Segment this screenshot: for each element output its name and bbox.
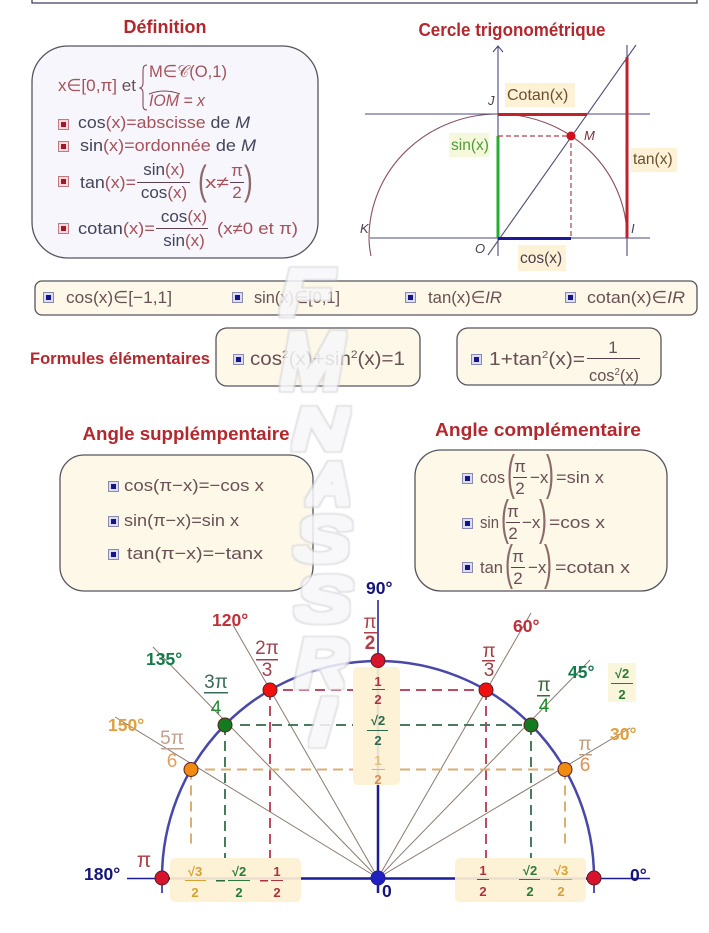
axes [365,45,650,256]
panel: formula one plus tan squared: 1 [608,338,618,357]
row: tan definition [58,158,253,203]
label backgrounds [449,83,677,271]
heading: Définition: Définition [124,17,206,37]
labels: cos(x) [520,250,562,267]
row: tan complementary: 2 [513,569,523,588]
panel: formula cos squared plus sin squared: 2 [351,349,358,361]
watermark: M [281,318,343,405]
radian labels: 2 [365,633,375,654]
axis value labels: positive side: 2 [557,884,565,899]
panel: formula cos squared plus sin squared [216,328,420,386]
rays [115,613,630,878]
degree labels: 150° [108,715,144,735]
semicircle [162,661,594,878]
panel: supplementary angle: sin(π−x)=sin x [124,511,240,530]
radian labels: π [578,734,592,755]
row: sin complementary: =cos x [549,513,606,532]
row: sin complementary: −x [522,513,541,532]
orange projections [191,770,565,848]
labels: sin(x) [451,137,489,154]
panel: definition [32,46,318,258]
row: sin definition: sin(x)=ordonnée de M [80,136,257,155]
text: domain of x: x∈[0,π] et [58,76,136,95]
labels: J [487,93,495,108]
radian labels: 3π [204,672,228,693]
labels: Cotan(x) [507,87,568,104]
watermark: F [280,259,334,328]
row: cos complementary: ) [546,447,554,500]
axis value labels: vertical: 1 [374,753,382,768]
axis value labels: vertical: 1 [374,674,382,689]
axis value labels: vertical: 2 [374,772,382,787]
heading: Angle supplémentaire: Angle supplémpentaire [82,424,290,444]
watermark: R [296,626,348,700]
semicircle [369,114,627,256]
row: tan definition: ( [198,158,207,203]
row: cos complementary: =sin x [556,468,605,487]
row: tan definition: cos(x) [141,183,187,202]
brace system [140,62,227,110]
radian labels: 6 [580,755,590,776]
row: sin complementary [462,492,606,545]
row: tan definition: π [231,161,243,180]
red projections [270,690,486,858]
radian labels: 2π [255,638,279,659]
row: sin complementary: sin [480,513,499,532]
degree labels: 45° [568,662,594,682]
axis value labels: positive side: 2 [479,884,487,899]
brace system: M∈𝒞(O,1) [149,62,227,81]
top panel edge [32,0,697,3]
chart: unit circle angles [84,578,650,902]
row: cotan definition [58,207,298,250]
sin segment [496,136,500,238]
heading: Angle complémentaire: Angle complémentaire [435,420,641,440]
brace system: IOM = x [149,91,205,110]
panel: formula cos squared plus sin squared: cos [250,349,280,370]
row: cos definition: cos(x)=abscisse de M [78,113,251,132]
panel: formula one plus tan squared: 2 [542,350,549,361]
panel: formula cos squared plus sin squared: (x)+sin [289,349,351,370]
sqrt2 over 2 legend: √2 [615,666,629,681]
axis value labels: positive side: 2 [526,884,534,899]
row: tan definition: tan(x)= [80,173,136,192]
chart: trigonometric circle [360,45,677,271]
point M [566,132,576,140]
axis value labels: vertical: √2 [371,713,385,728]
radian labels: π [363,612,377,633]
radian labels: π [137,849,151,872]
degree labels: 180° [84,864,120,884]
panel: supplementary angle: cos(π−x)=−cos x [124,476,265,495]
axis value labels: vertical [367,674,388,787]
degree labels: 0° [630,865,647,885]
degree labels: 0 [382,881,392,901]
panel: complementary angle [415,447,667,591]
axis value labels: vertical: 2 [374,733,382,748]
row: tan definition: x≠ [205,173,229,192]
radian labels: π [482,641,496,662]
radian labels: 5π [160,728,184,749]
panel: formula one plus tan squared: 2 [615,367,620,378]
radian labels: 4 [211,698,222,719]
heading: Cercle trigonométrique: Cercle trigonométrique [418,20,606,40]
row: cos complementary: ( [507,447,515,500]
degree labels: 30° [610,724,636,744]
panel: ranges: cos(x)∈[−1,1] [66,288,172,307]
panel: supplementary angle: tan(π−x)=−tanx [127,544,264,563]
axes [162,878,594,893]
axis value labels: negative side: √3 [188,864,202,879]
radian labels: 3 [262,660,272,681]
axis value labels: negative side: 1 [273,864,281,879]
radian labels: 6 [167,751,177,772]
value highlight boxes [170,663,636,902]
row: tan complementary: =cotan x [555,558,631,577]
row: sin complementary: π [507,502,519,521]
panel: formula one plus tan squared: (x)= [548,349,585,369]
sqrt2 over 2 legend [611,666,633,702]
degree labels: 120° [212,610,248,630]
panel: formula cos squared plus sin squared: 2 [282,349,289,361]
sqrt2 over 2 legend: 2 [618,687,626,702]
axis value labels: positive side: √2 [523,863,537,878]
watermark: N [293,398,348,461]
heading: Formules élémentaires: Formules élémentaires [30,350,210,368]
row: sin complementary: 2 [508,524,518,543]
panel: ranges: cotan(x)∈IR [587,288,685,307]
watermark: S [295,567,351,633]
axis value labels: negative side [185,864,283,900]
axis value labels: negative side: 2 [273,885,281,900]
tan segment [626,57,628,238]
row: cotan definition: cotan(x)= [78,219,155,238]
axis value labels: positive side [477,863,572,899]
labels: O [475,241,485,256]
labels: M [584,128,595,143]
axis value labels: positive side: √3 [554,863,568,878]
degree labels: 135° [146,649,182,669]
radian labels: π [537,675,551,696]
panel: formula one plus tan squared: (x) [620,366,639,385]
row: tan complementary: tan [480,558,503,577]
watermark: S [294,507,350,573]
projections of M [498,136,571,238]
panel: ranges: sin(x)∈[0,1] [254,288,340,307]
radian labels: 3 [484,660,494,681]
row: cos complementary: π [514,457,526,476]
row: cos complementary: 2 [515,479,525,498]
row: sin complementary: ( [501,492,509,545]
panel: ranges: tan(x)∈IR [428,288,502,307]
labels: K [360,221,370,236]
panel: formula one plus tan squared [457,328,661,385]
axis value labels: negative side: 2 [191,885,199,900]
row: cotan definition: sin(x) [163,231,205,250]
row: tan definition: sin(x) [143,160,185,179]
row: tan definition: ) [244,158,253,203]
row: cotan definition: cos(x) [161,207,207,226]
row: sin complementary: ) [539,492,547,545]
axis value labels: negative side: √2 [232,864,246,879]
row: tan complementary: −x [528,558,547,577]
row: tan complementary: π [512,547,524,566]
axis value labels: negative side: 2 [235,885,243,900]
points on circle [155,654,601,885]
row: cos complementary [462,447,605,500]
watermark: I [309,687,335,758]
radian labels [137,612,592,872]
row: tan complementary: ) [544,537,552,590]
green projections [225,725,531,858]
panel: formula one plus tan squared: 1+tan [489,349,535,369]
panel: supplementary angle [60,455,313,591]
watermark [280,259,351,758]
labels: I [631,221,635,236]
row: tan complementary [462,537,631,590]
cotan segment [498,113,587,116]
panel: formula one plus tan squared: cos [589,366,615,385]
radian labels: 4 [539,696,550,717]
row: tan definition: 2 [232,183,242,202]
row: tan complementary: ( [505,537,513,590]
degree labels: 60° [513,616,539,636]
watermark: A [308,452,349,515]
labels: tan(x) [633,151,673,168]
degree labels: 90° [366,578,392,598]
labels [360,87,673,267]
row: cotan definition: (x≠0 et π) [217,219,298,238]
panel: formula cos squared plus sin squared: (x)=1 [358,349,405,370]
panel: ranges [35,281,697,315]
cos segment [498,237,571,240]
axis value labels: positive side: 1 [479,863,487,878]
degree labels [84,578,647,901]
axis value labels: vertical: 2 [374,692,382,707]
row: cos complementary: cos [480,468,505,487]
row: cos complementary: −x [530,468,549,487]
